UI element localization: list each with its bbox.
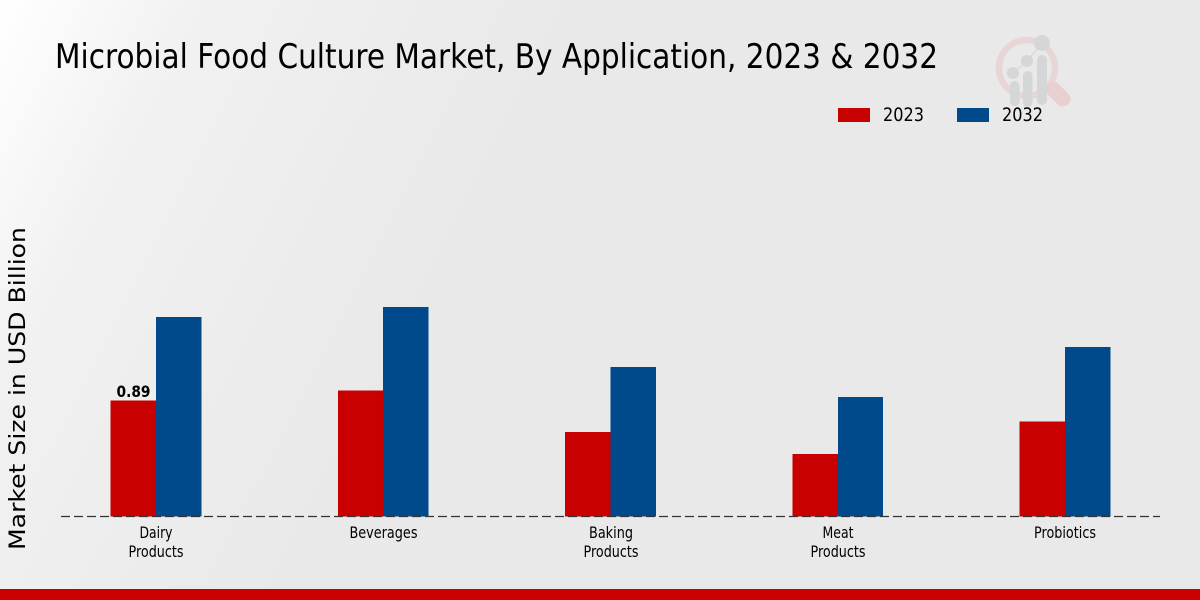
bar chart bbox=[61, 307, 1160, 516]
label: Baking Products: Baking bbox=[589, 523, 633, 542]
value label: 0.89: 0.89 bbox=[116, 382, 150, 401]
x axis labels bbox=[128, 523, 1096, 561]
label: Meat Products bbox=[810, 523, 866, 561]
x axis baseline bbox=[61, 516, 1160, 518]
legend bbox=[838, 104, 1043, 126]
bars: Baking Products bbox=[565, 367, 656, 516]
label: Probiotics: Probiotics bbox=[1034, 523, 1096, 542]
label: Dairy Products bbox=[128, 523, 184, 561]
watermark logo bbox=[999, 35, 1063, 107]
bars: Probiotics bbox=[1020, 347, 1110, 516]
label: Dairy Products: Products bbox=[128, 542, 184, 561]
bars: Dairy Products bbox=[110, 317, 202, 516]
bars: Beverages bbox=[338, 307, 428, 516]
label: Beverages: Beverages bbox=[350, 523, 418, 542]
label: Baking Products bbox=[584, 523, 638, 561]
legend item: 2032 bbox=[957, 104, 1043, 126]
footer bar bbox=[0, 589, 1200, 600]
y axis title: Market Size in USD Billion bbox=[5, 227, 31, 550]
legend item: 2023 bbox=[838, 104, 924, 126]
title: Microbial Food Culture Market, By Application, 2023 & 2032 bbox=[55, 37, 938, 77]
label: Meat Products: Meat bbox=[822, 523, 854, 542]
legend item: 2032: 2032 bbox=[1002, 104, 1043, 126]
label: Dairy Products: Dairy bbox=[140, 523, 172, 542]
legend item: 2023: 2023 bbox=[883, 104, 924, 126]
bars: Meat Products bbox=[792, 397, 883, 516]
label: Baking Products: Products bbox=[584, 542, 638, 561]
label: Meat Products: Products bbox=[810, 542, 866, 561]
